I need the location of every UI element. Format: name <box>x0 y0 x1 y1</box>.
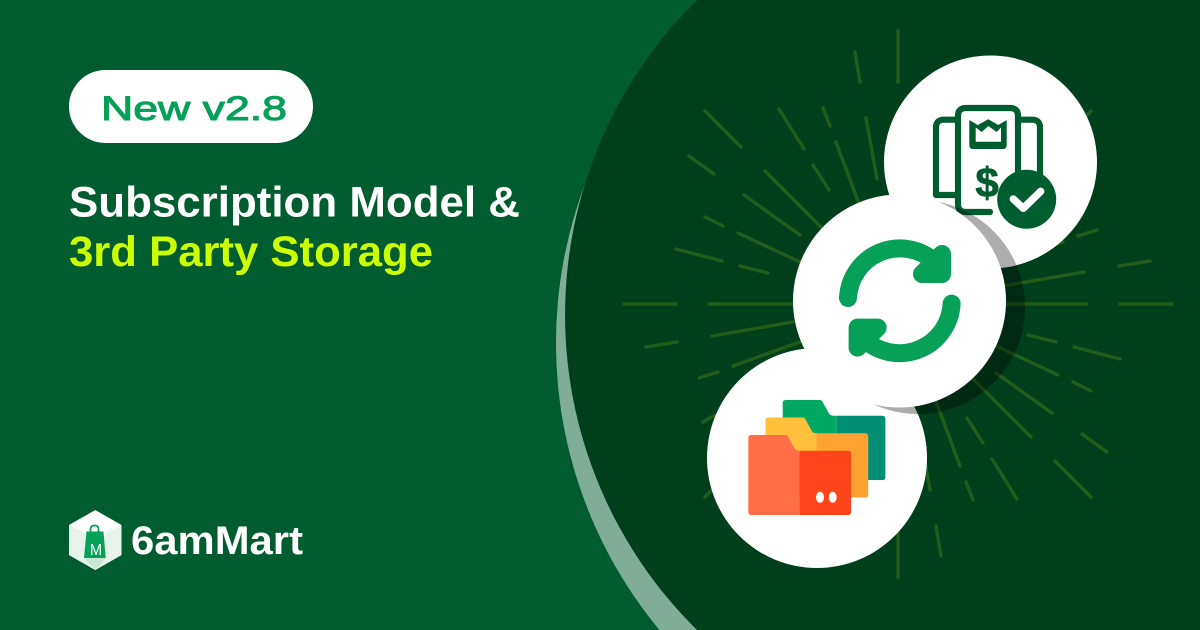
icon: subscription plan cards <box>936 108 1056 229</box>
upper arc <box>848 248 935 298</box>
title line 2: 3rd Party Storage <box>69 228 433 276</box>
title line 1: Subscription Model & <box>69 178 520 226</box>
circle drop shadow <box>811 200 1025 414</box>
back folder <box>783 400 885 480</box>
logo shopping bag <box>84 526 106 559</box>
radiating sunburst rays <box>624 31 1172 577</box>
sync badge circle <box>793 194 1006 408</box>
logo hexagon <box>69 510 122 570</box>
subscription badge circle <box>884 56 1097 268</box>
middle folder <box>766 418 868 498</box>
logo: 6amMart <box>69 510 303 570</box>
upper arrowhead <box>922 254 942 274</box>
lower arc <box>865 304 952 353</box>
icon: stacked folders <box>748 400 885 515</box>
icon: sync arrows <box>848 248 952 353</box>
check mark <box>1013 191 1041 208</box>
crown box <box>969 119 1007 149</box>
lower arrowhead <box>858 328 878 348</box>
logo wordmark: 6amMart <box>131 519 303 563</box>
front folder <box>748 435 851 515</box>
dark green circle panel <box>565 0 1200 630</box>
check badge <box>997 170 1056 229</box>
light curved band <box>556 0 1200 630</box>
storage badge circle <box>707 348 927 568</box>
dollar sign: $ <box>975 159 999 206</box>
right back card outline <box>1020 120 1040 178</box>
logo shopping bag: M <box>90 542 102 559</box>
front plan card outline <box>958 108 1018 212</box>
version pill <box>69 70 313 143</box>
version text: New v2.8 <box>101 90 287 128</box>
left back card outline <box>936 120 957 195</box>
